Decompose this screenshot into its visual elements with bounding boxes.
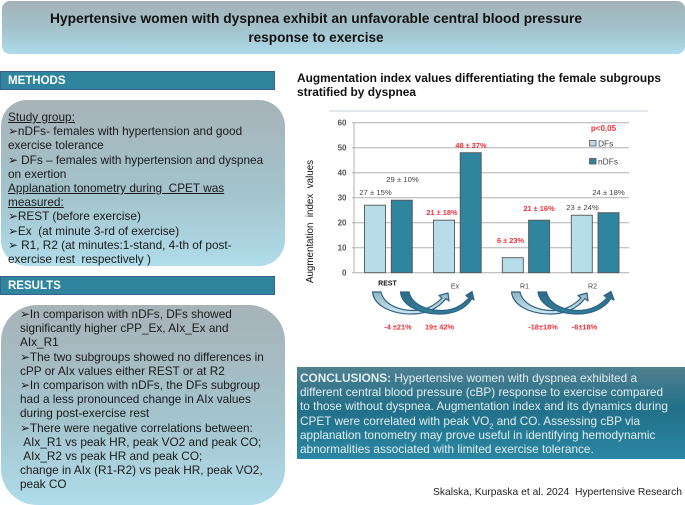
change labels [384,322,598,332]
results text: significantly higher cPP_Ex, AIx_Ex and [20,321,229,335]
results heading bar [0,276,275,295]
y axis ticks: 50 [338,144,347,153]
change labels: 19± 42% [425,322,454,332]
category labels: Ex [451,284,460,290]
y axis ticks: 10 [338,244,347,253]
change labels: -18±18% [528,322,558,332]
results text: ➢In comparison with nDFs, the DFs subgroup [20,378,260,392]
study group text: ➢Ex (at minute 3-rd of exercise) [8,224,179,238]
methods heading bar [0,71,275,90]
study group text: exercise tolerance [8,138,104,152]
results text [20,307,264,491]
panel: conclusions: different central blood pressure (cBP) response to exercise compared [300,385,663,399]
results text: AIx_R1 vs peak HR, peak VO2 and peak CO; [23,435,261,449]
study group text: ➢REST (before exercise) [8,209,141,223]
study group text: on exertion [8,167,66,181]
results text: change in AIx (R1-R2) vs peak HR, peak VO2, [20,463,263,477]
value labels: 29 ± 10% [386,175,419,184]
bar chart: 6 ± 23% [497,236,524,245]
results text: during post-exercise rest [20,406,149,420]
value labels: 27 ± 15% [359,188,392,197]
results text: had a less pronounced change in AIx values [20,392,251,406]
value labels: 24 ± 18% [592,188,625,197]
results text: ➢The two subgroups showed no differences in [20,350,264,364]
y axis title: Augmentation index values [305,160,316,283]
value labels [359,175,625,212]
study group text: measured: [8,195,64,209]
study group text: ➢ DFs – females with hypertension and dyspnea [8,153,263,167]
y axis ticks: 60 [338,119,347,128]
y axis ticks: 30 [338,194,347,203]
legend: nDFs [598,156,618,166]
panel: conclusions: applanation tonometry may prove useful in identifying hemodynamic [300,428,655,442]
bars [364,153,619,273]
change labels: -4 ±21% [384,322,412,332]
panel: conclusions: CONCLUSIONS: Hypertensive women with dyspnea exhibited a [300,371,637,385]
results text: AIx_R2 vs peak HR and peak CO; [23,449,202,463]
bar chart: 21 ± 18% [426,208,458,217]
chart heading [297,71,661,99]
title banner [2,1,685,54]
results text: ➢In comparison with nDFs, DFs showed [20,307,232,321]
change labels: -6±18% [572,322,598,332]
value labels: 23 ± 24% [566,203,599,212]
chart heading: Augmentation index values differentiating the female subgroups [297,71,661,85]
title line 1: Hypertensive women with dyspnea exhibit an unfavorable central blood pressure [50,11,582,26]
study group text [8,110,264,266]
citation: Skalska, Kurpaska et al. 2024 Hypertensive Research [433,487,682,498]
bar chart: 21 ± 16% [523,204,555,213]
chart heading: stratified by dyspnea [297,85,416,99]
panel: conclusions [297,367,685,459]
y axis ticks: 0 [342,269,347,278]
results text: ➢There were negative correlations between: [20,421,253,435]
y axis ticks: 20 [338,219,347,228]
panel: methods [1,100,285,266]
y axis ticks [338,119,347,278]
results text: cPP or AIx values either REST or at R2 [20,364,225,378]
category labels [378,280,597,290]
methods heading bar: METHODS [8,75,66,87]
panel: results [1,305,285,505]
study group text: Study group: [8,110,75,124]
category labels: REST [378,280,398,288]
bar chart [305,110,648,332]
category labels: R2 [588,284,597,290]
results heading bar: RESULTS [8,280,61,292]
category labels: R1 [520,284,529,290]
study group text: Applanation tonometry during CPET was [8,181,224,195]
legend [590,124,618,166]
bar chart: 48 ± 37% [455,141,487,150]
y axis ticks: 40 [338,169,347,178]
panel: conclusions: CPET were correlated with peak VO2 and CO. Assessing cBP via [300,414,640,430]
legend: p<0,05 [591,124,617,133]
arrows: change between time points [372,292,614,314]
study group text: ➢nDFs- females with hypertension and good [8,124,242,138]
panel: conclusions: to those without dyspnea. Augmentation index and its dynamics during [300,399,668,413]
study group text: ➢ R1, R2 (at minutes:1-stand, 4-th of post- [8,238,232,252]
results text: peak CO [20,477,67,491]
legend: DFs [598,138,613,148]
title line 2: response to exercise [248,30,384,45]
panel: conclusions: abnormalities associated with limited exercise tolerance. [300,442,594,456]
results text: AIx_R1 [20,335,59,349]
study group text: exercise rest respectively ) [8,252,151,266]
